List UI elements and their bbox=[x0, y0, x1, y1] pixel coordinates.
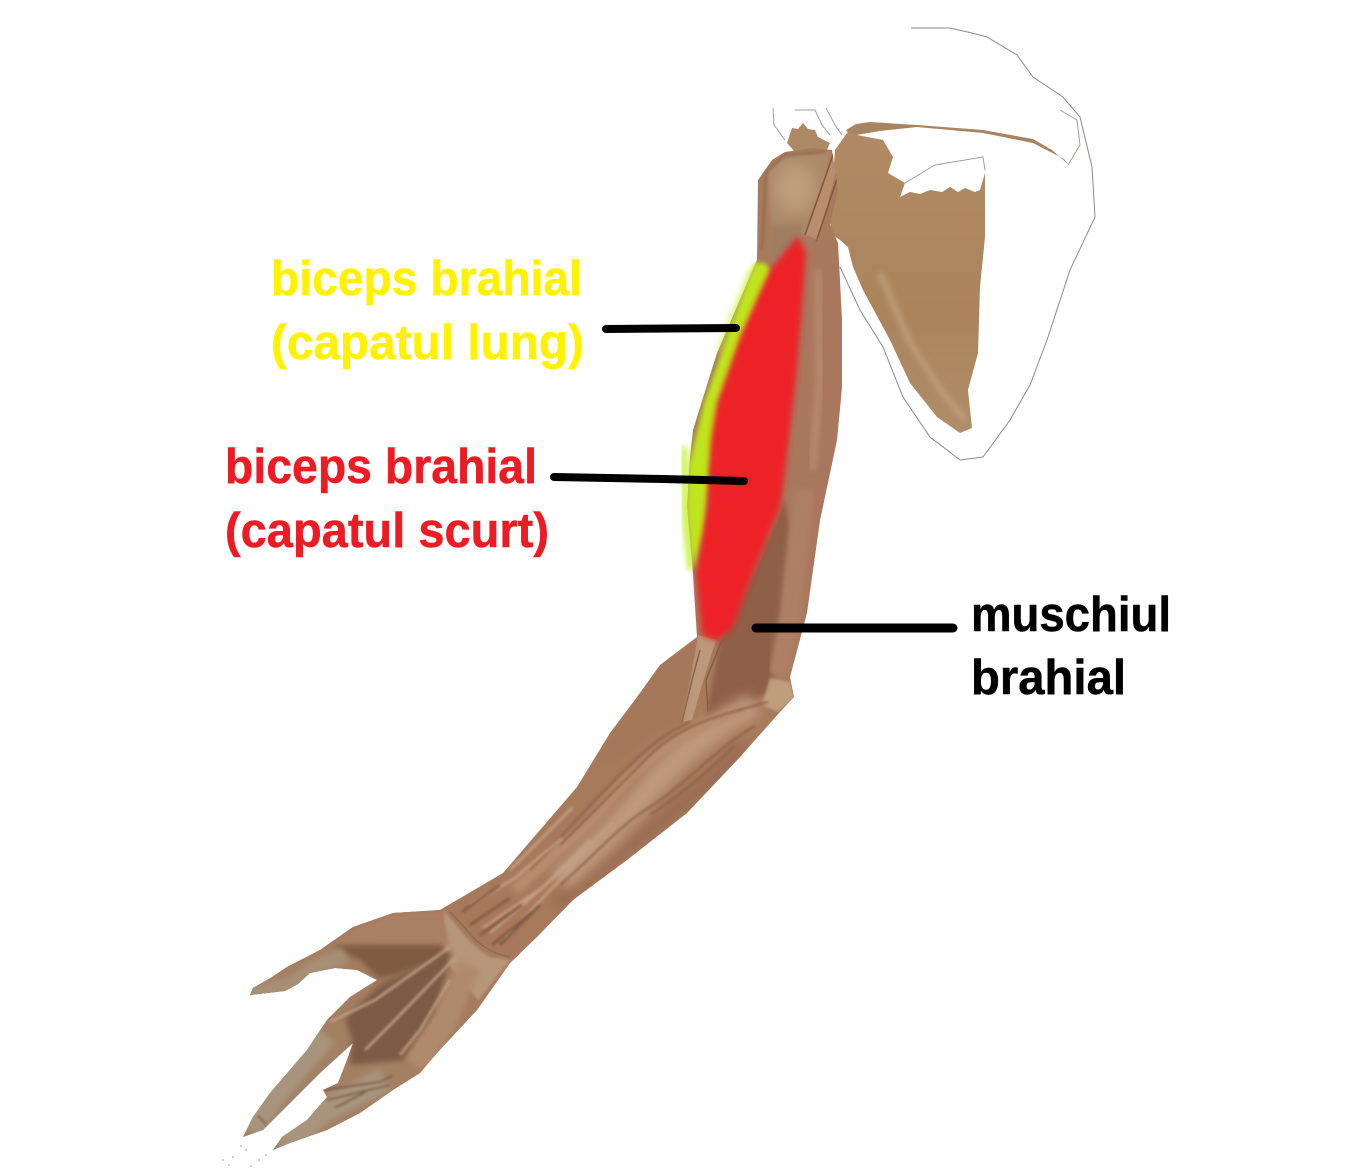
forearm belly light bbox=[560, 705, 755, 880]
biceps tendon bbox=[806, 154, 836, 239]
lateral muscle highlight bbox=[812, 270, 820, 470]
thumb muscle bbox=[419, 915, 450, 945]
top shoulder sketch lines bbox=[773, 108, 1080, 183]
thumb tip tone bbox=[250, 955, 345, 995]
brachialis dark bbox=[705, 500, 790, 725]
label: brachialis: muschiul bbox=[971, 588, 1171, 642]
yellow-green halo upper bbox=[718, 268, 752, 352]
yellow-green halo lower bbox=[684, 447, 691, 570]
scapula bbox=[830, 133, 985, 433]
torn tissue above humerus bbox=[787, 123, 830, 152]
forearm tendons bbox=[470, 807, 613, 938]
label: biceps long head bbox=[271, 252, 584, 370]
upper arm lateral muscle bbox=[812, 238, 842, 576]
tendon edges bbox=[804, 154, 837, 242]
epicondyle bbox=[762, 678, 794, 712]
clavicle bbox=[846, 122, 1069, 165]
humeral head bbox=[768, 153, 829, 236]
tendon line bbox=[682, 640, 722, 722]
label: biceps long head: (capatul lung) bbox=[271, 316, 584, 370]
shaft shading under head bbox=[771, 226, 802, 260]
leader line: brachialis bbox=[756, 624, 953, 632]
highlight: biceps long head (yellow-green) bbox=[684, 262, 772, 570]
hand tone bbox=[243, 900, 520, 1150]
thenar dark bbox=[330, 945, 450, 978]
wrist dark tendon gaps bbox=[462, 885, 540, 945]
brachioradialis upper bbox=[619, 638, 698, 722]
palm dark muscles bbox=[345, 950, 452, 1065]
long head tendon groove bbox=[762, 152, 825, 250]
wrist retinaculum bbox=[443, 910, 510, 1000]
scapula spine highlight bbox=[880, 273, 965, 420]
base arm fill bbox=[220, 130, 860, 1160]
stray specks near fingertips bbox=[222, 1146, 267, 1166]
label: biceps short head: (capatul scurt) bbox=[225, 504, 549, 558]
leader line: long head bbox=[606, 328, 736, 329]
arm muscles bbox=[220, 130, 860, 1160]
label: biceps short head bbox=[225, 440, 549, 558]
hypothenar light bbox=[415, 965, 470, 1065]
humeral head highlight bbox=[775, 164, 815, 212]
label: brachialis bbox=[971, 588, 1171, 705]
palm tendons bbox=[330, 947, 455, 1055]
finger creases bbox=[258, 1076, 392, 1124]
biceps distal tendon bbox=[682, 635, 716, 722]
label: brachialis: brahial bbox=[971, 651, 1126, 705]
label: biceps short head: biceps brahial bbox=[225, 440, 537, 494]
retinaculum edge bbox=[450, 912, 510, 957]
thin body outline around shoulder bbox=[840, 28, 1095, 460]
forearm lower dark band bbox=[555, 745, 745, 905]
forearm dark grooves bbox=[530, 702, 768, 885]
anatomical arm diagram bbox=[222, 28, 1168, 1167]
highlight: biceps short head (red) bbox=[696, 236, 806, 641]
label: biceps long head: biceps brahial bbox=[271, 252, 582, 306]
red halo at lower left bbox=[690, 590, 696, 628]
outer brachial rim bbox=[778, 490, 805, 675]
leader line: short head bbox=[554, 477, 744, 481]
fingers tone bbox=[250, 1035, 385, 1145]
forearm second light band bbox=[515, 710, 745, 890]
